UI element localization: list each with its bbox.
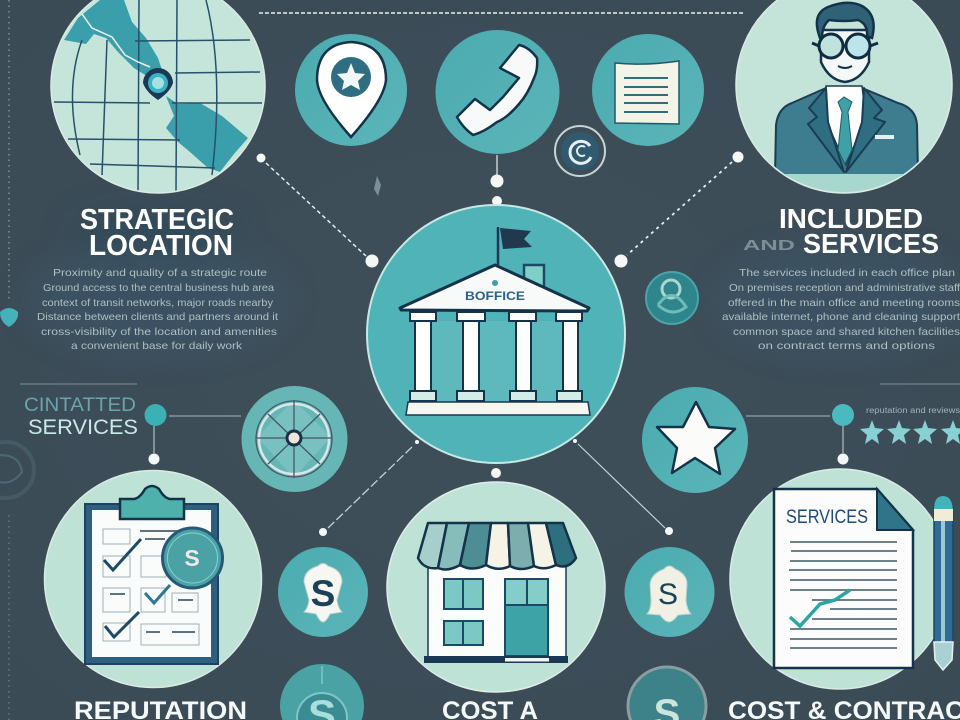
icon: faded side swirl	[0, 442, 34, 498]
rating stars: reputation and reviews	[866, 406, 960, 415]
text block: strategic location: Proximity and quality of a strategic route	[53, 267, 267, 279]
icon: dollar bell left: S	[311, 573, 335, 614]
panel: storefront	[387, 482, 605, 692]
clipboard board	[85, 504, 218, 664]
icon: small spiral badge	[555, 126, 605, 176]
shop body	[428, 565, 566, 659]
icon: dollar bell right: S	[658, 578, 678, 611]
building flag	[498, 227, 532, 265]
icon: phone circle	[436, 30, 560, 154]
panel: included services person	[735, 0, 953, 194]
dollar coin badge: S	[184, 545, 200, 571]
building sign: BOFFICE	[465, 291, 525, 303]
shop awning	[418, 523, 576, 569]
building base	[406, 402, 590, 415]
text block: included services: common space and shared kitchen facilities	[733, 326, 960, 338]
building chimney	[524, 265, 544, 290]
heading: strategic location: STRATEGIC	[80, 204, 234, 236]
icon: side teal drop	[0, 308, 18, 327]
icon: document circle	[592, 34, 704, 146]
shop windows	[444, 579, 483, 645]
contract fold	[877, 489, 913, 530]
text block: included services: offered in the main office and meeting rooms	[728, 297, 960, 309]
heading: included services: AND	[743, 237, 795, 254]
contract text lines	[789, 542, 897, 648]
text block: strategic location: Distance between clients and partners around it	[37, 311, 278, 323]
panel: services contract	[730, 469, 950, 689]
checklist boxes	[103, 529, 199, 645]
text block: strategic location: Ground access to the central business hub area	[43, 282, 274, 294]
panel: strategic location map	[51, 0, 265, 193]
panel: central office building	[367, 205, 625, 463]
text block: strategic location: context of transit networks, major roads nearby	[42, 297, 274, 309]
person head	[821, 30, 869, 82]
shop base	[424, 656, 568, 663]
person tie	[838, 97, 852, 164]
icon: swirl coin	[646, 272, 698, 324]
contract heading: SERVICES	[786, 507, 868, 528]
heading: included services: INCLUDED	[779, 203, 923, 234]
text block: included services: on contract terms and options	[758, 340, 935, 352]
checkmarks	[104, 539, 170, 637]
shop door	[505, 579, 548, 656]
text block: included services: On premises reception and administrative staff	[729, 282, 960, 294]
text block: included services	[722, 267, 960, 352]
icon: dollar coin bottom left	[280, 664, 364, 720]
map grid	[54, 0, 262, 192]
icon: pen	[934, 496, 953, 670]
connector lines	[144, 152, 854, 536]
building columns	[410, 312, 582, 401]
person shirt	[826, 86, 866, 165]
rating stars	[860, 384, 960, 444]
icon: small faded pin	[374, 176, 381, 196]
map land	[64, 0, 248, 172]
heading: contacted services: SERVICES	[28, 416, 138, 439]
icon: star circle	[642, 387, 748, 493]
heading: contacted services: CINTATTED	[24, 395, 136, 416]
person lapels	[808, 88, 885, 172]
icon: dollar coin bottom right	[628, 667, 706, 720]
contract page	[774, 489, 913, 668]
heading: included services: SERVICES	[803, 228, 939, 259]
contract check	[790, 590, 850, 626]
text block: strategic location	[37, 267, 278, 352]
icon: dollar bell left	[278, 547, 368, 637]
icon: dollar bell right	[624, 547, 714, 637]
dollar coin badge	[162, 528, 222, 588]
person suit	[775, 88, 918, 175]
icon: wheel circle	[242, 386, 348, 492]
text block: included services: available internet, phone and cleaning support	[722, 311, 960, 323]
heading: strategic location: LOCATION	[89, 230, 233, 262]
panel: reputation checklist	[44, 470, 262, 688]
icon: location marker	[143, 68, 173, 100]
text block: strategic location: cross-visibility of the location and amenities	[41, 326, 277, 338]
text block: included services: The services included in each office plan	[739, 267, 955, 279]
heading: strategic location	[80, 204, 234, 262]
clipboard clip	[120, 486, 184, 519]
text block: strategic location: a convenient base for daily work	[71, 340, 243, 352]
building roof	[400, 265, 589, 311]
icon: location pin circle	[295, 34, 407, 146]
heading: contacted services	[24, 395, 138, 439]
heading: included services	[743, 203, 939, 259]
